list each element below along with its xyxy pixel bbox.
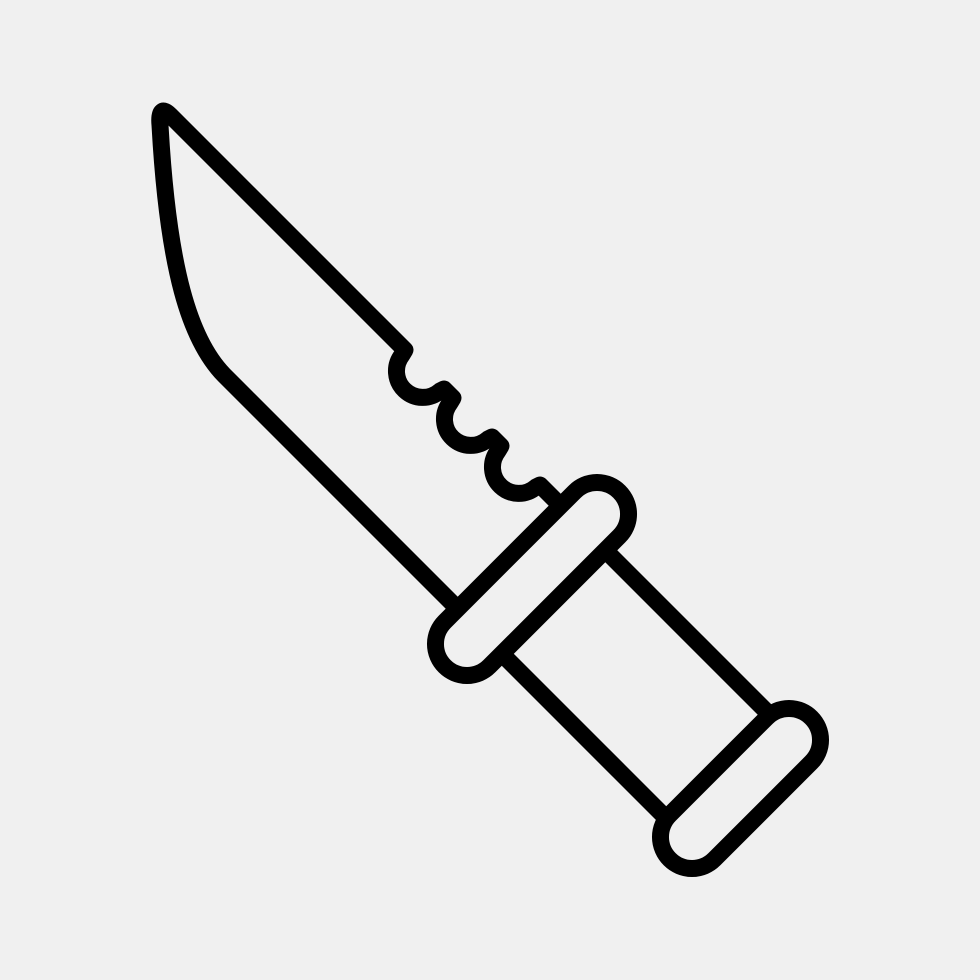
grip upper edge: [611, 556, 766, 711]
blade guard: [435, 482, 629, 676]
blade with serrated spine: [160, 111, 559, 604]
handle grip: [507, 556, 766, 815]
grip lower edge: [507, 659, 663, 815]
pommel: [660, 708, 821, 869]
